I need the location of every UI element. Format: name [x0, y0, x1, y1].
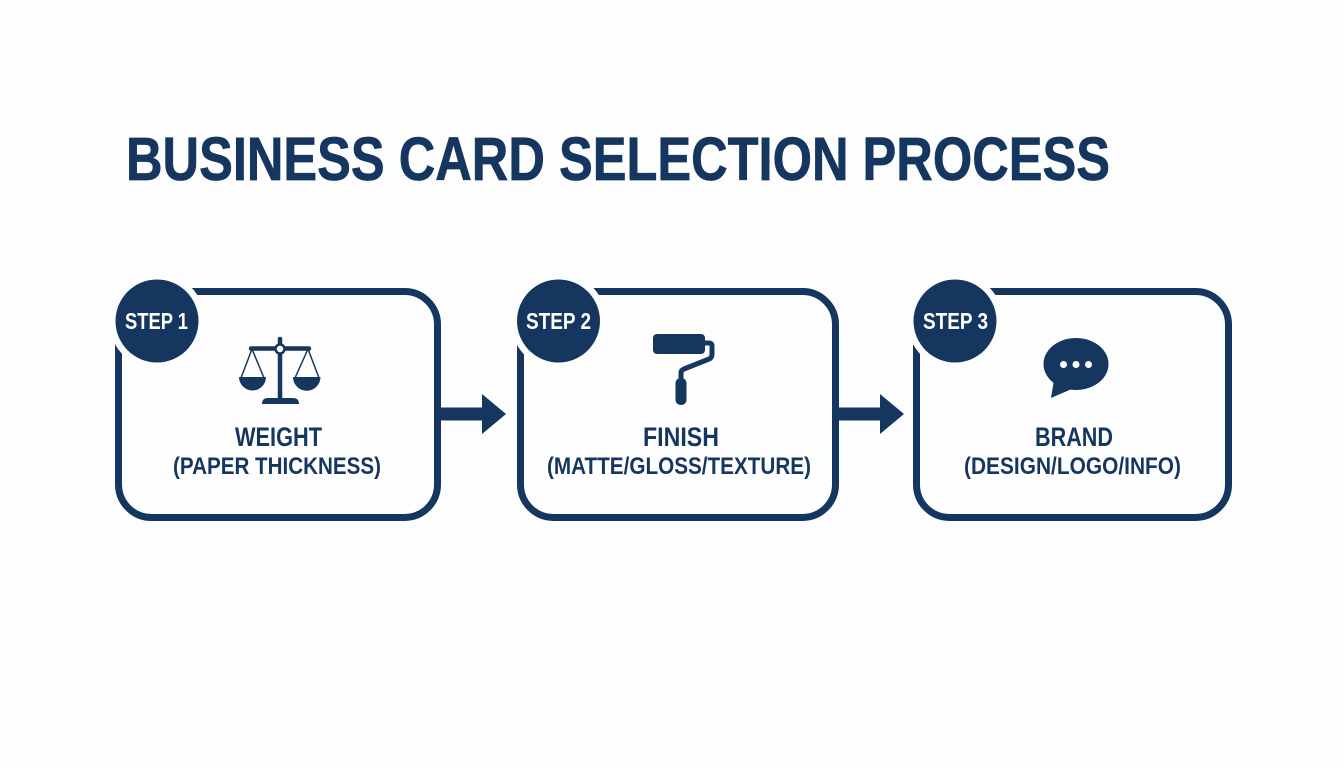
panel: step 2 finish [510, 273, 836, 518]
card outline 2 [520, 292, 836, 518]
label: finish: FINISH [643, 422, 719, 452]
arrow: step 2 to step 3 [836, 394, 904, 434]
icon: balance scale [239, 339, 320, 404]
badge: step 1: STEP 1 [125, 308, 188, 334]
label: paper thickness: (PAPER THICKNESS) [173, 453, 381, 480]
panel: step 1 weight [109, 273, 438, 518]
badge: step 3: STEP 3 [923, 308, 988, 334]
card outline 1 [118, 292, 438, 518]
card outline 3 [916, 292, 1228, 518]
badge: step 2: STEP 2 [526, 308, 591, 334]
badge: step 2 [510, 273, 606, 369]
title: BUSINESS CARD SELECTION PROCESS [126, 125, 1110, 193]
icon: paint roller [653, 334, 712, 405]
panel: step 3 brand [907, 273, 1228, 518]
icon: speech bubble [1044, 338, 1108, 398]
label: design logo info: (DESIGN/LOGO/INFO) [964, 453, 1181, 480]
badge: step 1 [109, 273, 205, 369]
label: weight: WEIGHT [235, 422, 322, 452]
label: brand: BRAND [1035, 422, 1113, 452]
badge: step 3 [907, 273, 1003, 369]
label: matte gloss texture: (MATTE/GLOSS/TEXTURE) [547, 453, 811, 480]
arrow: step 1 to step 2 [438, 394, 506, 434]
